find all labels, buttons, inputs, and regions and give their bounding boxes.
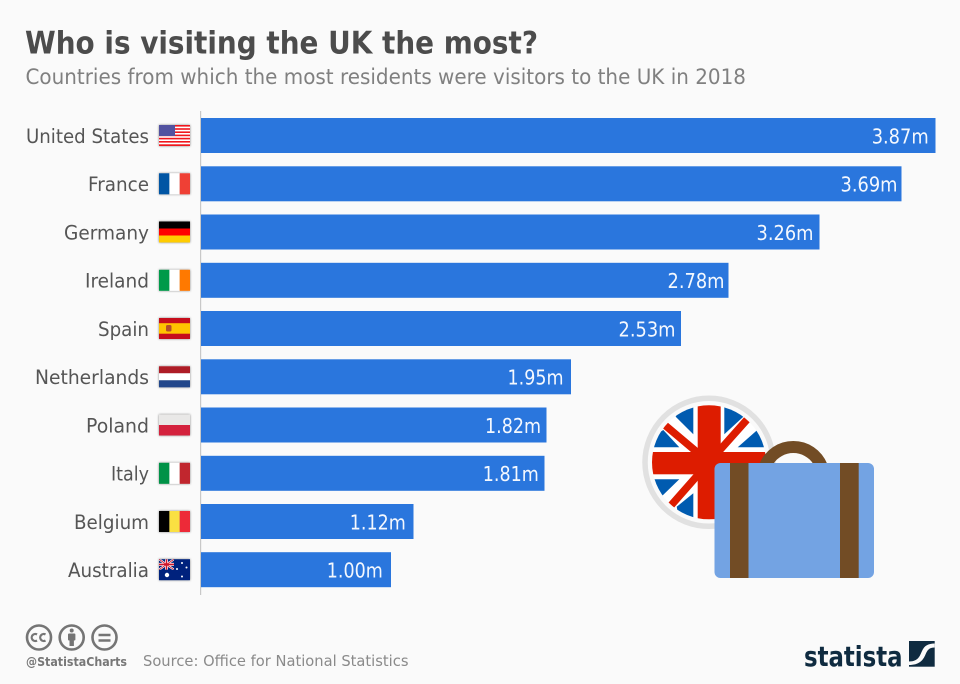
row: Australia: Australia <box>68 559 149 582</box>
row: Belgium <box>74 504 414 539</box>
row: France: 3.69m <box>840 172 898 196</box>
row: Netherlands: Netherlands <box>35 366 149 389</box>
icon: no derivatives <box>92 626 116 650</box>
title: Who is visiting the UK the most? <box>25 25 538 61</box>
row: Spain <box>98 311 681 346</box>
flag: Ireland <box>159 270 190 291</box>
row: Spain: Spain <box>98 318 149 341</box>
row: Germany: Germany <box>64 222 149 244</box>
row: Ireland <box>85 263 728 298</box>
source: Source: Office for National Statistics <box>143 652 409 670</box>
row: Ireland: 2.78m <box>668 269 724 293</box>
logo: statista: statista <box>804 640 902 673</box>
row: Netherlands: 1.95m <box>508 366 564 390</box>
flag: Netherlands <box>159 366 190 387</box>
row: Italy: 1.81m <box>483 462 539 486</box>
row: Australia <box>68 552 391 587</box>
icon: suitcase handle <box>759 441 827 464</box>
bar chart <box>26 118 936 587</box>
illustration: union jack and suitcase <box>645 398 874 578</box>
icons: creative commons licence <box>27 626 116 650</box>
flag: Spain <box>159 318 190 339</box>
row: Italy <box>111 456 544 491</box>
flag: Australia <box>159 559 190 580</box>
flag: Belgium <box>159 511 190 532</box>
icon: statista mark <box>909 641 935 667</box>
row: France <box>88 166 902 201</box>
row: Belgium: 1.12m <box>350 510 406 534</box>
flag: Italy <box>159 463 190 484</box>
row: Poland: Poland <box>86 414 149 438</box>
row: Poland <box>86 408 546 442</box>
flag: Germany <box>159 222 190 242</box>
flag: Poland <box>159 414 190 436</box>
axis line <box>200 111 201 595</box>
icon: union jack badge <box>645 398 775 526</box>
row: Spain: 2.53m <box>618 317 676 341</box>
credit: StatistaCharts: @StatistaCharts <box>26 655 127 669</box>
row: Italy: Italy <box>111 463 149 486</box>
subtitle: Countries from which the most residents were visitors to the UK in 2018 <box>26 65 746 89</box>
row: United States: 3.87m <box>872 124 929 148</box>
row: France: France <box>88 173 149 196</box>
icon: cc <box>27 626 51 650</box>
row: Australia: 1.00m <box>327 558 383 582</box>
row: Netherlands <box>35 359 571 394</box>
row: Ireland: Ireland <box>85 270 149 293</box>
flag: United States <box>159 125 190 146</box>
row: Germany <box>64 214 820 250</box>
flag: France <box>159 173 190 194</box>
icon: attribution <box>60 626 84 650</box>
icon: suitcase body <box>714 463 874 578</box>
row: Germany: 3.26m <box>756 221 814 245</box>
row: Belgium: Belgium <box>74 511 149 534</box>
row: United States: United States <box>26 125 149 148</box>
row: United States <box>26 118 936 153</box>
row: Poland: 1.82m <box>485 414 541 438</box>
